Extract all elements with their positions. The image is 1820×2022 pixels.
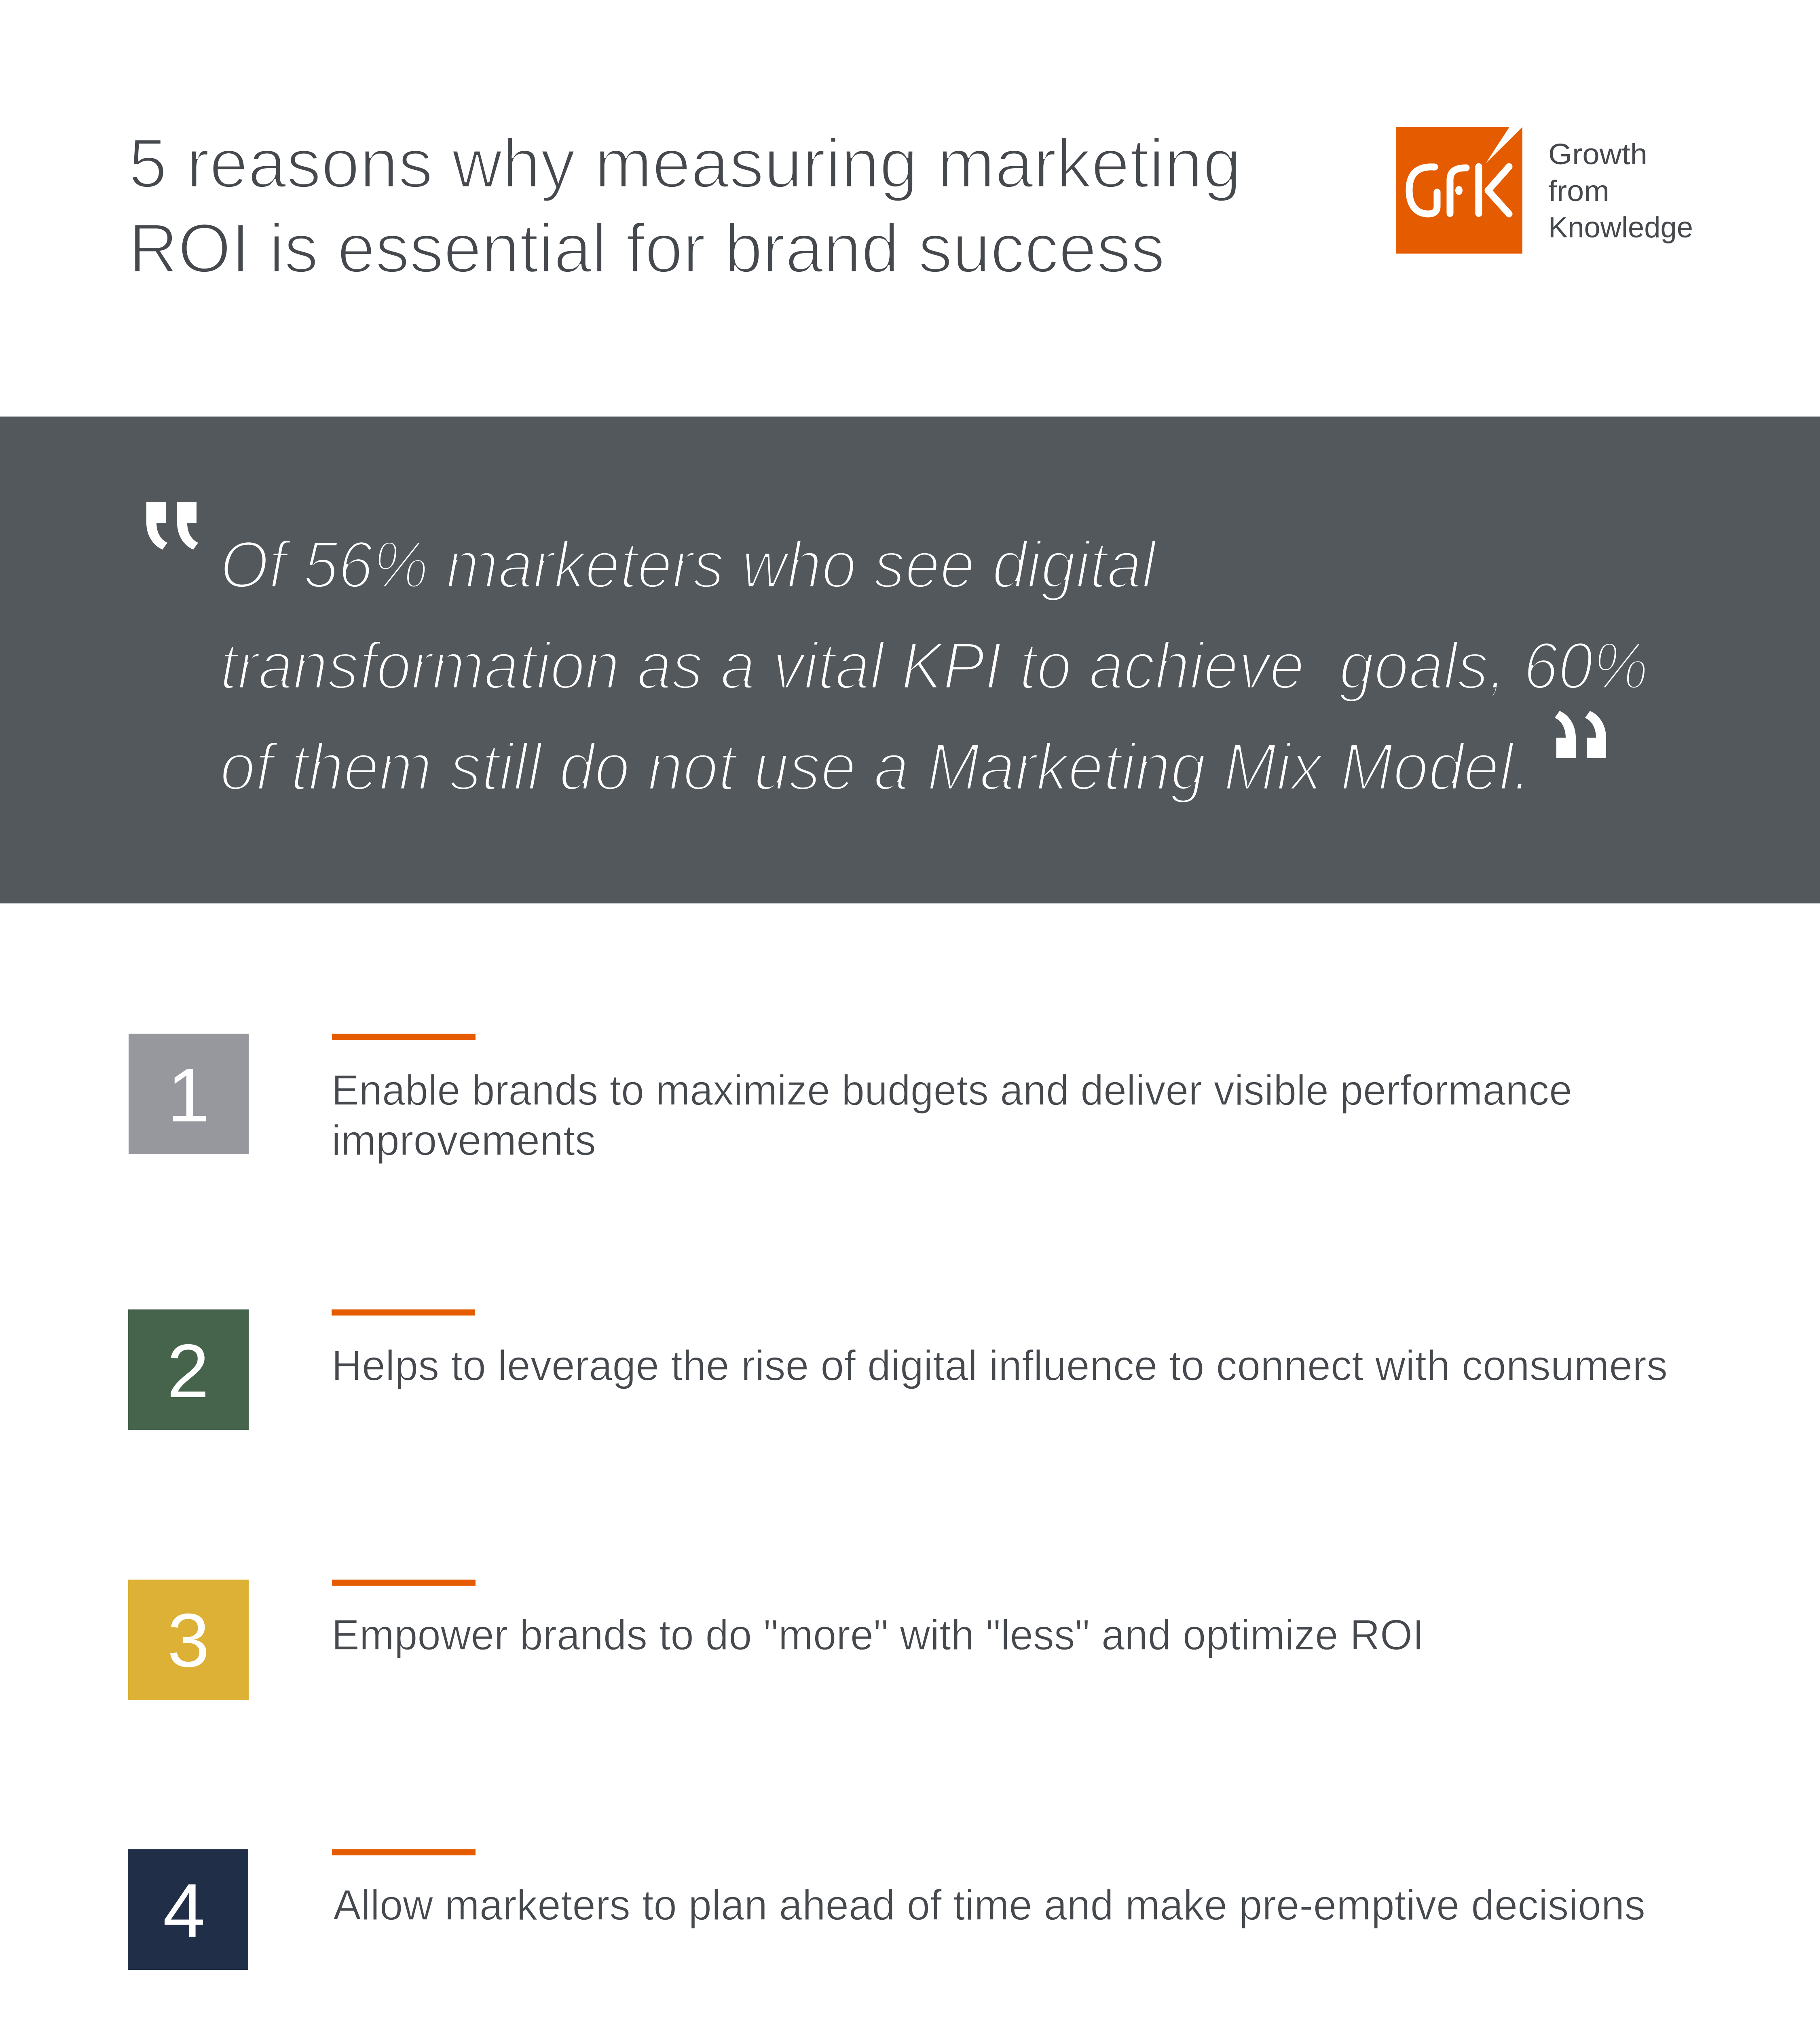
- logo tagline: Growth: [1548, 138, 1647, 171]
- icon: opening quotation mark: [146, 502, 198, 550]
- logo: GfK Growth from Knowledge: [1396, 127, 1693, 254]
- title: [129, 125, 1241, 287]
- quote text: Of 56% marketers who see digital: [220, 527, 1157, 602]
- number badge 2: [128, 1309, 249, 1430]
- icon: GfK orange square: [1396, 127, 1522, 254]
- accent line: [332, 1034, 476, 1040]
- reason text 3: Empower brands to do "more" with "less" and optimize ROI: [332, 1611, 1424, 1659]
- accent line: [332, 1309, 475, 1316]
- number badge 4: [128, 1849, 248, 1970]
- reason 4: [128, 1849, 1645, 1970]
- accent line: [332, 1580, 476, 1586]
- quote text: [220, 527, 1649, 804]
- number badge 1: 1: [167, 1053, 209, 1138]
- number badge 2: 2: [167, 1328, 209, 1413]
- reason text 1: [332, 1066, 1572, 1164]
- reason 2: [128, 1309, 1668, 1430]
- reason text 2: Helps to leverage the rise of digital influence to connect with consumers: [332, 1342, 1668, 1390]
- logo tagline: from: [1548, 175, 1609, 207]
- number badge 3: [128, 1580, 249, 1700]
- icon: closing quotation mark: [1555, 711, 1606, 758]
- number badge 1: [129, 1034, 249, 1154]
- accent line: [332, 1849, 476, 1855]
- reason 1: [129, 1034, 1572, 1164]
- quote text: transformation as a vital KPI to achieve goals, 60%: [220, 628, 1649, 703]
- reason 3: [128, 1580, 1424, 1700]
- title: ROI is essential for brand success: [129, 209, 1165, 287]
- title: 5 reasons why measuring marketing: [129, 125, 1241, 202]
- reason text 4: Allow marketers to plan ahead of time and make pre-emptive decisions: [333, 1881, 1645, 1929]
- logo tagline: Knowledge: [1548, 212, 1693, 244]
- number badge 3: 3: [167, 1598, 209, 1683]
- reason text 1: Enable brands to maximize budgets and deliver visible performance: [332, 1066, 1572, 1114]
- number badge 4: 4: [163, 1868, 205, 1953]
- logo tagline: [1548, 138, 1693, 244]
- panel: quote band: [0, 417, 1820, 903]
- reason text 1: improvements: [332, 1117, 596, 1164]
- quote text: of them still do not use a Marketing Mix Model.: [220, 730, 1531, 804]
